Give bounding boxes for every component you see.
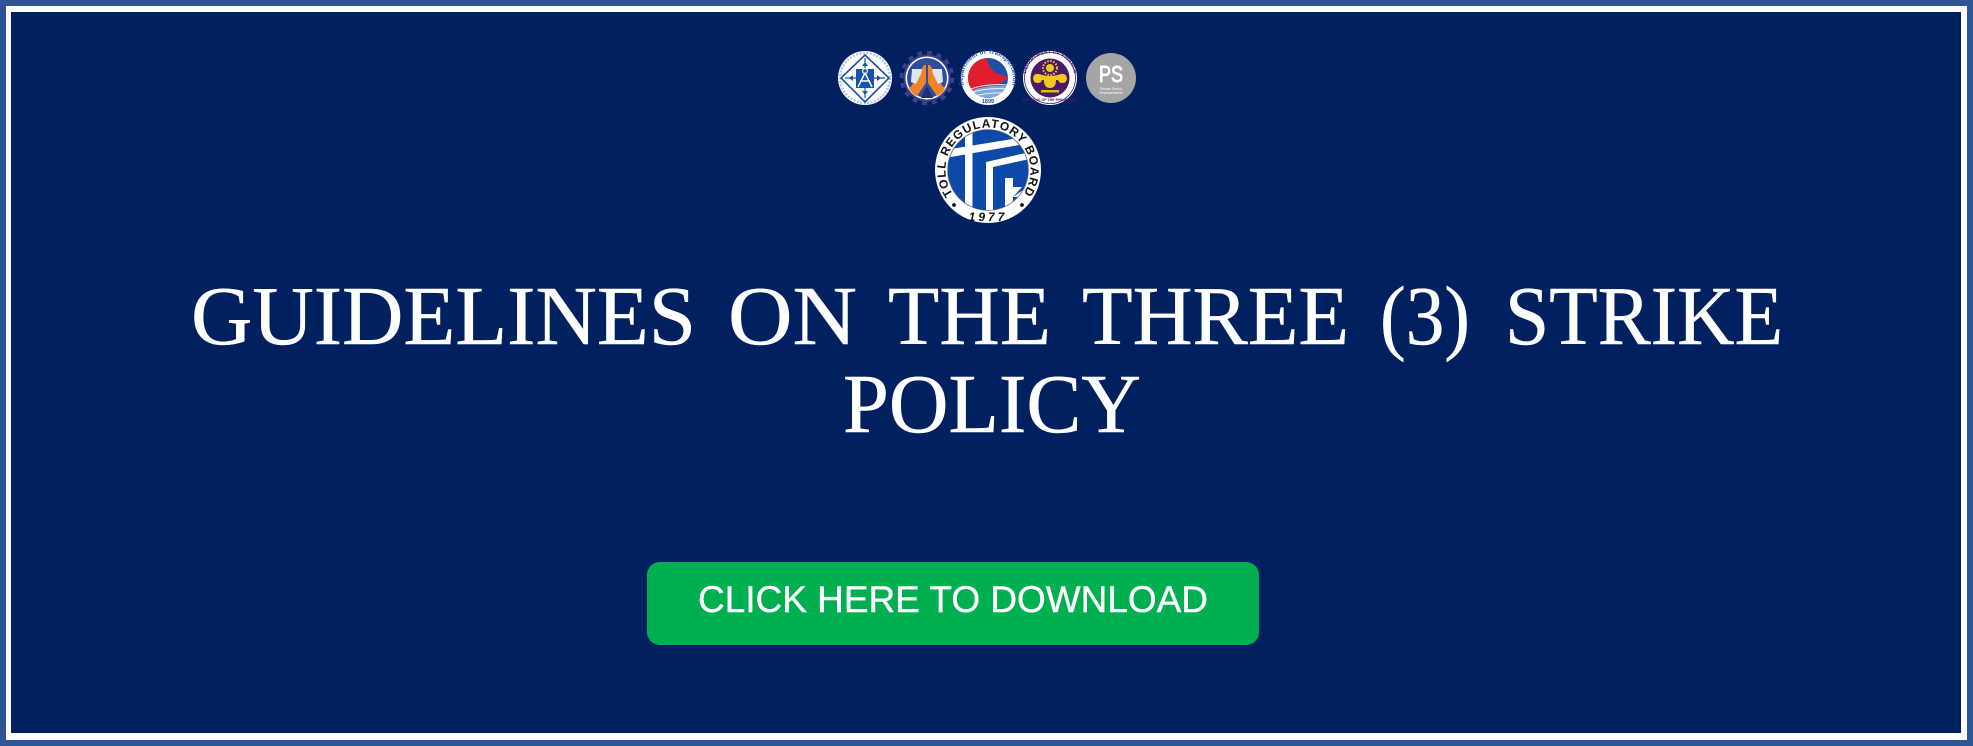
download button: CLICK HERE TO DOWNLOAD — [698, 579, 1208, 620]
icon: department of finance seal: DEPARTMENT OF FINANCE — [1022, 50, 1078, 74]
icon: private sector representative badge: Representative — [1099, 91, 1123, 95]
title — [191, 270, 1783, 451]
title: GUIDELINES — [191, 270, 696, 363]
icon: department of transportation seal: Department of Transportation — [959, 50, 1018, 86]
download button — [647, 562, 1259, 645]
title: (3) — [1380, 270, 1470, 363]
icon: department of transportation seal — [959, 50, 1018, 105]
logo row — [838, 50, 1136, 106]
title: THREE — [1082, 270, 1349, 363]
icon: toll regulatory board seal: TOLL REGULATORY BOARD — [937, 119, 1039, 198]
icon: private sector representative badge — [1086, 53, 1136, 103]
title: THE — [888, 270, 1051, 363]
icon: department of finance seal: REPUBLIC OF THE PHILIPPINES — [1022, 98, 1079, 102]
icon: department of transportation seal: 1899 — [982, 99, 994, 105]
title: POLICY — [843, 358, 1141, 451]
title: ON — [728, 270, 857, 363]
icon: agency seal 2 gear — [902, 52, 952, 104]
icon: private sector representative badge: PS — [1099, 61, 1123, 87]
icon: agency seal 1 — [838, 51, 892, 105]
icon: sun — [1043, 61, 1057, 75]
icon: toll regulatory board seal: 1977 — [969, 210, 1007, 224]
title: STRIKE — [1505, 270, 1783, 363]
icon: department of finance seal — [1022, 50, 1079, 105]
icon: private sector representative badge: Private Sector — [1100, 87, 1123, 91]
